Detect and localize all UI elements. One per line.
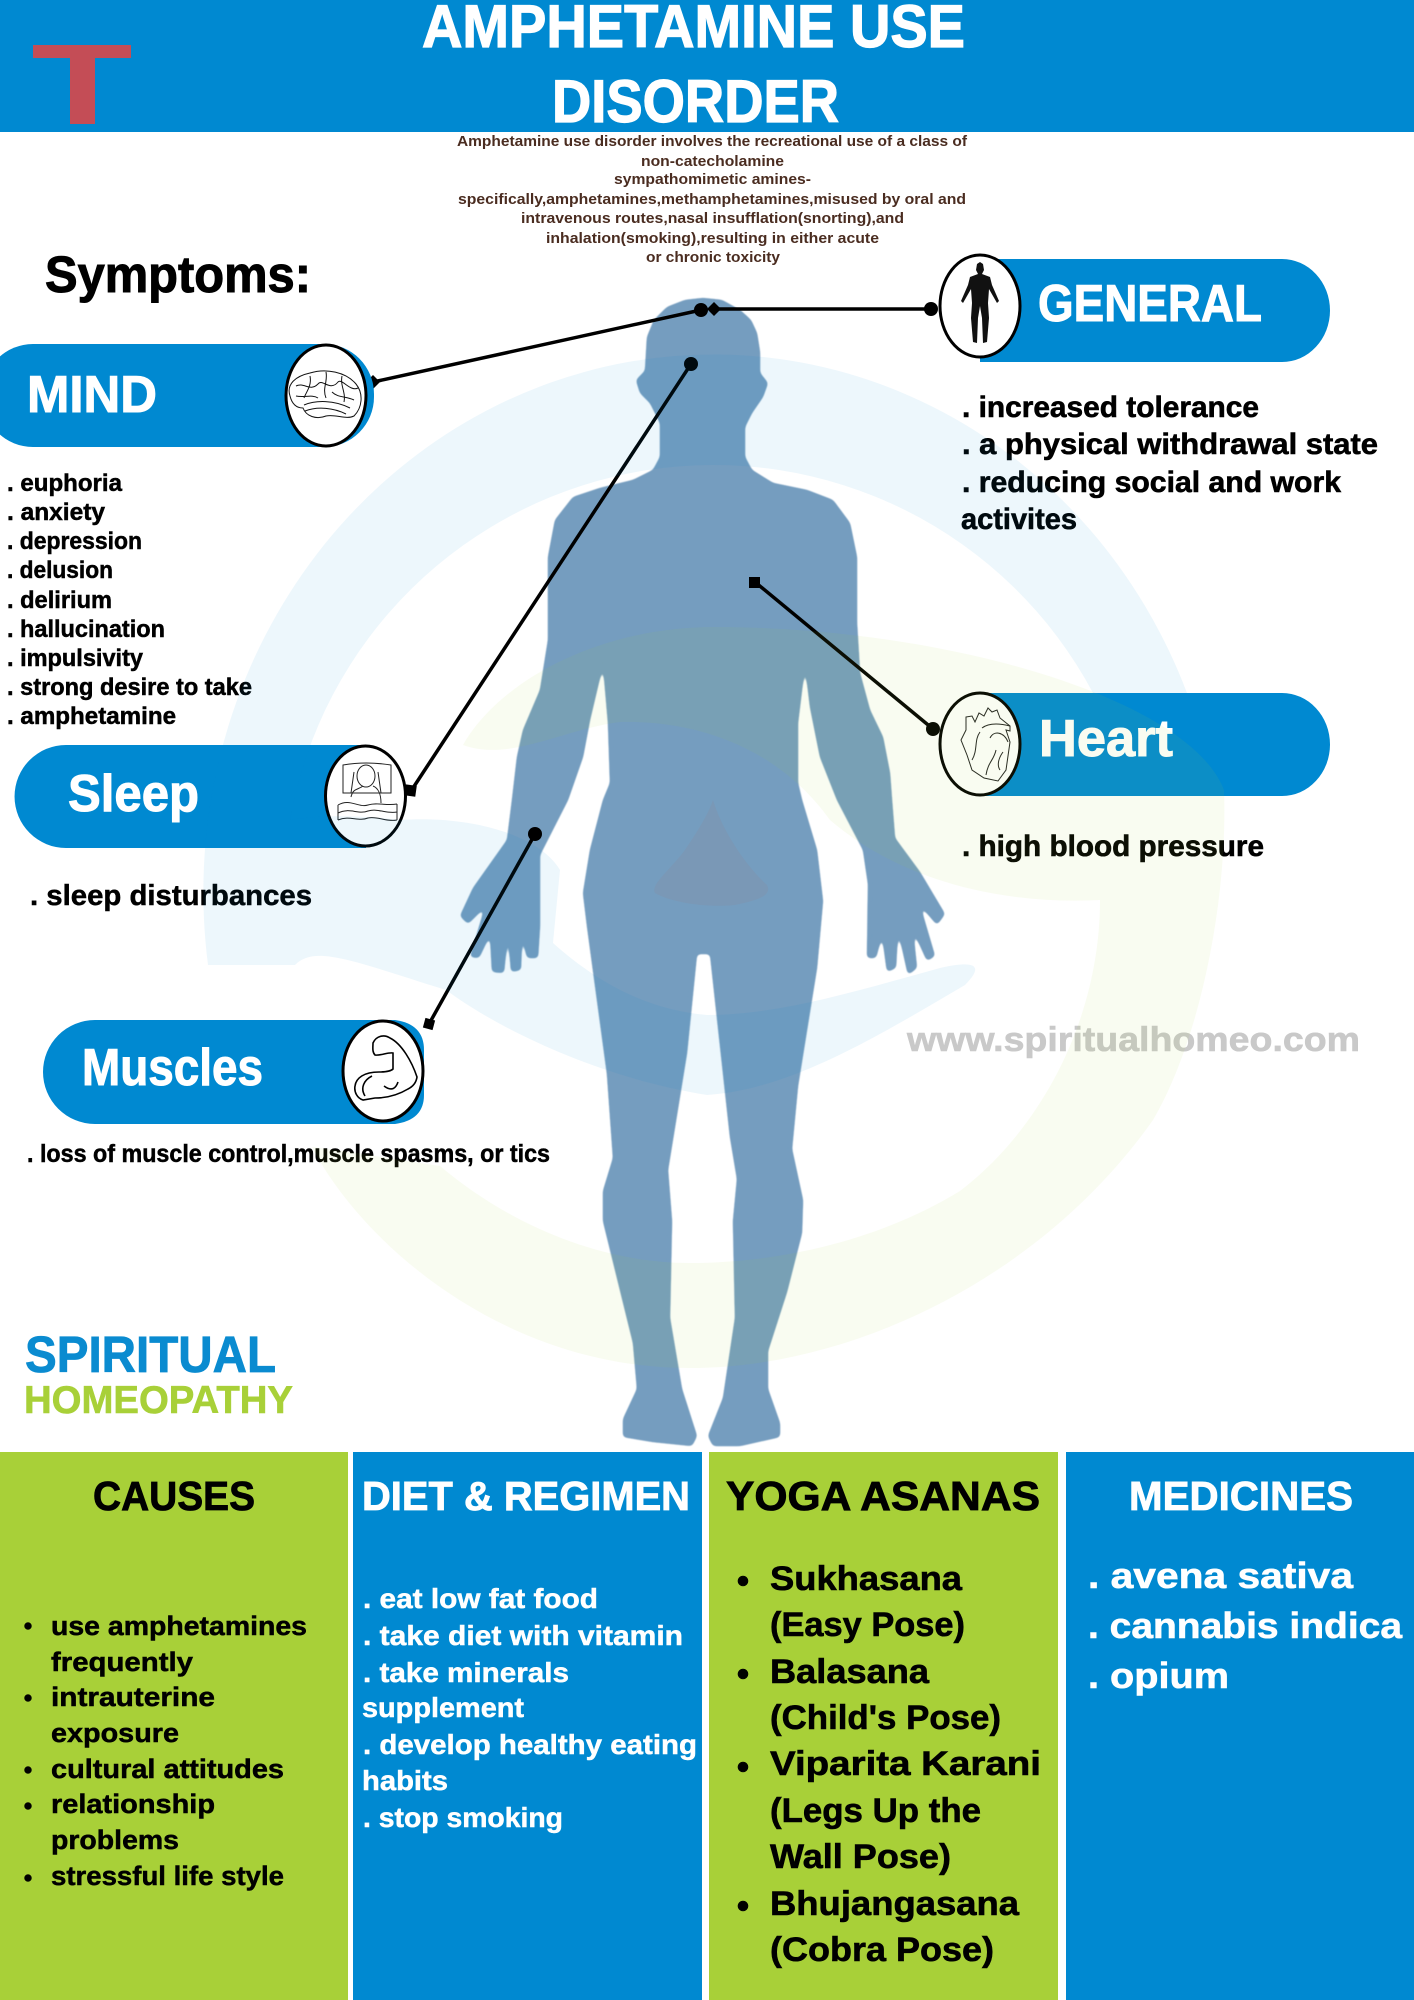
diet list: . develop healthy eating [363, 1729, 697, 1760]
title: DISORDER [552, 68, 839, 135]
panel: heart [940, 693, 1330, 796]
intro text block: intravenous routes,nasal insufflation(snorting),and [521, 210, 904, 227]
intro text block: inhalation(smoking),resulting in either acute [546, 230, 879, 247]
general symptoms list: . increased tolerance [962, 391, 1259, 424]
mind symptoms list: . delusion [7, 557, 113, 584]
mind symptoms list [7, 470, 252, 730]
human body silhouette [460, 298, 945, 1446]
panel: sleep: Sleep [68, 765, 199, 823]
panel: muscles [43, 1020, 424, 1124]
muscles symptom text: . loss of muscle control,muscle spasms, or tics [27, 1140, 550, 1168]
sleep symptom text: . sleep disturbances [30, 880, 312, 912]
header banner [0, 0, 1414, 132]
diet list: . take minerals [363, 1657, 569, 1688]
causes list: frequently [51, 1647, 193, 1677]
panel: causes [0, 1452, 348, 2000]
panel: causes: CAUSES [93, 1473, 255, 1519]
panel: medicines: MEDICINES [1129, 1473, 1353, 1519]
yoga list: Wall Pose) [770, 1838, 951, 1876]
intro text block [457, 133, 968, 266]
faint logo watermark: green ring [312, 627, 1224, 1368]
causes list: exposure [51, 1718, 179, 1748]
diet list: . stop smoking [363, 1802, 563, 1833]
intro text block: Amphetamine use disorder involves the recreational use of a class of [457, 133, 968, 150]
diet list: . eat low fat food [363, 1583, 598, 1614]
mind symptoms list: . strong desire to take [7, 674, 252, 701]
yoga list: Bhujangasana [770, 1885, 1020, 1923]
causes list [24, 1611, 307, 1891]
yoga list: Sukhasana [770, 1560, 963, 1598]
website watermark: www.spiritualhomeo.com [906, 1021, 1360, 1059]
mind symptoms list: . anxiety [7, 499, 106, 526]
general symptoms list: . a physical withdrawal state [962, 428, 1378, 461]
mind symptoms list: . amphetamine [7, 703, 176, 730]
medicines list: . avena sativa [1088, 1555, 1354, 1596]
intro text block: specifically,amphetamines,methamphetamines,misused by oral and [458, 191, 966, 208]
causes list: intrauterine [51, 1682, 215, 1712]
mind symptoms list: . impulsivity [7, 645, 144, 672]
icon: anatomical heart [961, 708, 1010, 781]
causes list: stressful life style [51, 1861, 284, 1891]
mind symptoms list: . depression [7, 528, 142, 555]
medicines list: . cannabis indica [1088, 1605, 1403, 1646]
red T logo mark [33, 45, 131, 124]
connector: mind to head [366, 303, 708, 389]
general symptoms list [961, 391, 1378, 536]
icon: brain [289, 371, 361, 418]
brand logo text: SPIRITUAL [25, 1326, 276, 1383]
intro text block: non-catecholamine [641, 153, 784, 170]
yoga list: (Cobra Pose) [770, 1931, 994, 1969]
diet list: habits [362, 1765, 448, 1796]
mind symptoms list: . hallucination [7, 616, 165, 643]
symptoms heading: Symptoms: [45, 246, 311, 303]
panel: yoga asanas [709, 1452, 1058, 2000]
general symptoms list: activites [961, 503, 1077, 536]
connector: heart to chest [749, 577, 940, 736]
medicines list [1088, 1555, 1403, 1696]
causes list: relationship [51, 1789, 215, 1819]
panel: sleep [15, 745, 405, 848]
panel: muscles: Muscles [82, 1039, 263, 1097]
panel: mind: MIND [27, 366, 157, 424]
yoga list: Balasana [770, 1653, 930, 1691]
mind symptoms list: . euphoria [7, 470, 123, 497]
causes list: problems [51, 1825, 179, 1855]
connector: sleep to head [404, 357, 698, 797]
medicines list: . opium [1088, 1655, 1229, 1696]
mind symptoms list: . delirium [7, 587, 112, 614]
icon: flexed arm [355, 1036, 417, 1100]
brand logo text: HOMEOPATHY [24, 1379, 293, 1422]
causes list: cultural attitudes [51, 1754, 284, 1784]
diet list [362, 1583, 697, 1833]
panel: diet and regimen [353, 1452, 702, 2000]
panel: diet and regimen: DIET & REGIMEN [362, 1473, 690, 1519]
yoga list: (Legs Up the [770, 1792, 981, 1830]
general symptoms list: . reducing social and work [962, 466, 1341, 499]
brand logo text [24, 1326, 293, 1422]
diet list: supplement [362, 1692, 524, 1723]
heart symptom text: . high blood pressure [962, 830, 1264, 863]
panel: general: GENERAL [1038, 275, 1262, 333]
panel: general [940, 255, 1330, 362]
panel: mind [0, 344, 374, 447]
panel: yoga asanas: YOGA ASANAS [726, 1473, 1040, 1519]
yoga list [738, 1560, 1041, 1969]
connector: muscles to forearm [423, 827, 542, 1030]
yoga list: (Easy Pose) [770, 1606, 965, 1644]
faint logo watermark: blue ring [203, 354, 1187, 1095]
icon: human figure [961, 262, 999, 343]
title [422, 0, 965, 135]
intro text block: or chronic toxicity [646, 249, 781, 266]
yoga list: Viparita Karani [770, 1745, 1041, 1783]
panel: heart: Heart [1039, 710, 1173, 768]
icon: person sleeping [338, 763, 397, 820]
panel: medicines [1066, 1452, 1414, 2000]
diet list: . take diet with vitamin [363, 1620, 683, 1651]
causes list: use amphetamines [51, 1611, 307, 1641]
connector: general to head [707, 302, 938, 316]
intro text block: sympathomimetic amines- [614, 171, 811, 188]
yoga list: (Child's Pose) [770, 1699, 1001, 1737]
